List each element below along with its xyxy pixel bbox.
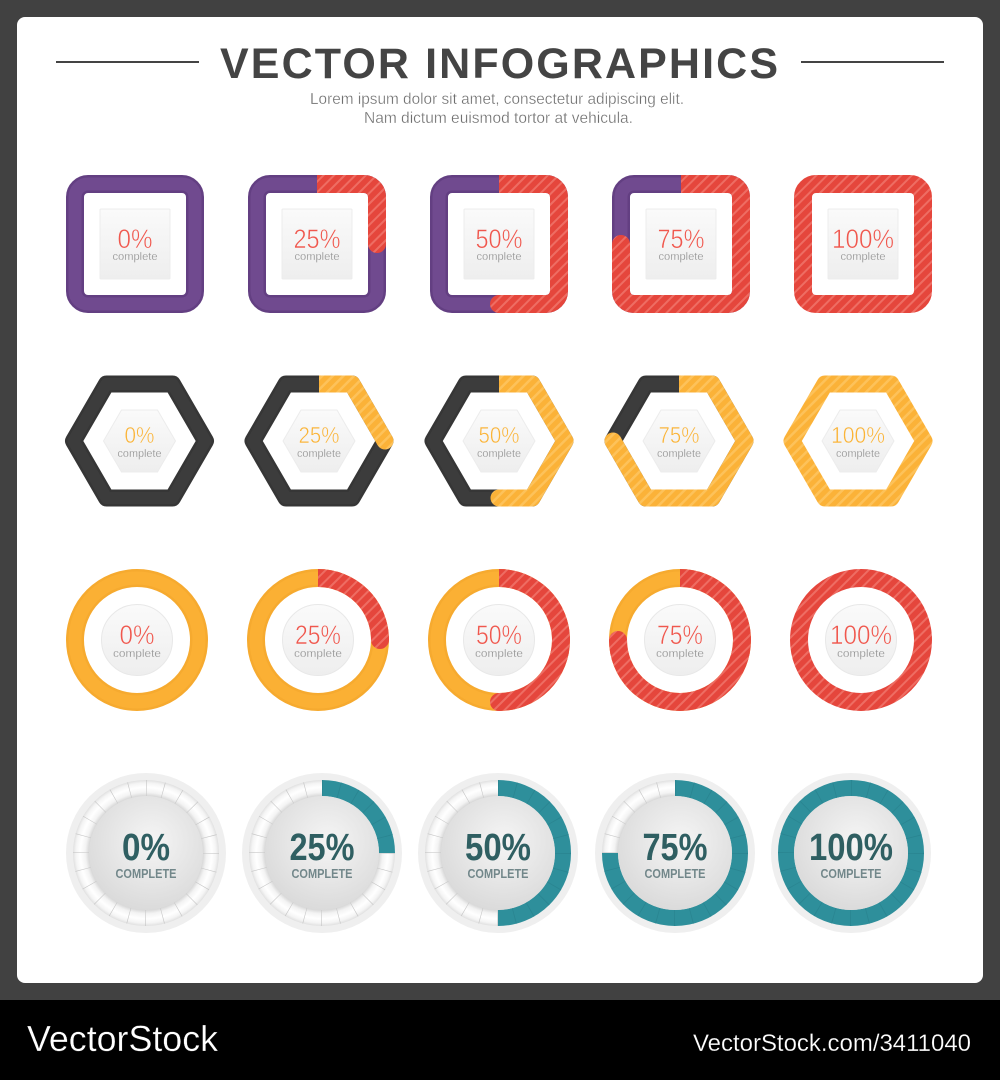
subtitle: Nam dictum euismod tortor at vehicula. [364, 110, 633, 127]
square 50%: 50% [476, 224, 522, 254]
ring 50%: 50% [476, 620, 522, 650]
title: VECTOR INFOGRAPHICS [220, 40, 778, 88]
hexagon 50%: 50% [478, 422, 520, 448]
dial 75%: COMPLETE [644, 866, 706, 881]
dial 100% [771, 773, 931, 933]
row: hexagon progress indicators [74, 384, 924, 506]
dial 50%: COMPLETE [468, 866, 529, 881]
row: segmented dial indicators [66, 773, 931, 933]
hexagon 100%: complete [836, 448, 880, 460]
subtitle: Lorem ipsum dolor sit amet, consectetur adipiscing elit. [310, 91, 684, 108]
dial 0%: 0% [122, 827, 170, 869]
ring 50%: complete [475, 648, 523, 660]
hexagon 75%: complete [657, 448, 701, 460]
hexagon 100% [792, 384, 924, 498]
dial 50% [418, 773, 578, 933]
dial 0% [66, 773, 226, 933]
dial 75% [595, 773, 755, 933]
hexagon 0%: 0% [124, 422, 154, 448]
footer url: VectorStock.com/3411040 [693, 1030, 971, 1057]
hexagon 75%: 75% [658, 422, 700, 448]
footer logo: VectorStock [27, 1018, 219, 1059]
ring 75%: 75% [657, 620, 703, 650]
ring 50% [437, 578, 561, 711]
square 0% [75, 184, 195, 304]
square 50% [439, 184, 559, 313]
hexagon 25%: complete [297, 448, 341, 460]
dial 100%: 100% [809, 827, 893, 869]
square 0%: 0% [118, 224, 152, 254]
square 100% [803, 184, 923, 304]
ring 100%: complete [837, 648, 885, 660]
ring 25%: complete [294, 648, 342, 660]
hexagon 75% [604, 384, 745, 498]
subtitle [310, 91, 684, 127]
square 75%: 75% [658, 224, 704, 254]
ring 75% [609, 578, 742, 702]
footer band [0, 1000, 1000, 1080]
row: ring progress indicators [75, 578, 923, 711]
ring 0% [75, 578, 199, 702]
dial 25%: COMPLETE [292, 866, 353, 881]
square 25%: complete [294, 251, 340, 263]
ring 0%: complete [113, 648, 161, 660]
ring 100%: 100% [830, 620, 892, 650]
hexagon 0% [74, 384, 206, 498]
dial 25%: 25% [290, 827, 354, 869]
square 0%: complete [112, 251, 158, 263]
square 50%: complete [476, 251, 522, 263]
ring 25% [256, 578, 389, 702]
hexagon 25%: 25% [298, 422, 340, 448]
hexagon 25% [253, 384, 394, 498]
square 25% [257, 184, 386, 304]
hexagon 50%: complete [477, 448, 521, 460]
square 75% [612, 184, 741, 304]
ring 0%: 0% [120, 620, 154, 650]
dial 25% [242, 773, 402, 933]
square 75%: complete [658, 251, 704, 263]
row: square progress indicators [75, 184, 923, 313]
dial 50%: 50% [465, 827, 531, 869]
dial 0%: COMPLETE [116, 866, 177, 881]
square 100%: 100% [832, 224, 894, 254]
ring 100% [799, 578, 923, 702]
ring 75%: complete [656, 648, 704, 660]
square 25%: 25% [294, 224, 340, 254]
hexagon 100%: 100% [831, 422, 885, 448]
hexagon 0%: complete [118, 448, 162, 460]
dial 100%: COMPLETE [820, 866, 882, 881]
hexagon 50% [433, 384, 565, 506]
square 100%: complete [840, 251, 886, 263]
ring 25%: 25% [295, 620, 341, 650]
dial 75%: 75% [642, 827, 708, 869]
